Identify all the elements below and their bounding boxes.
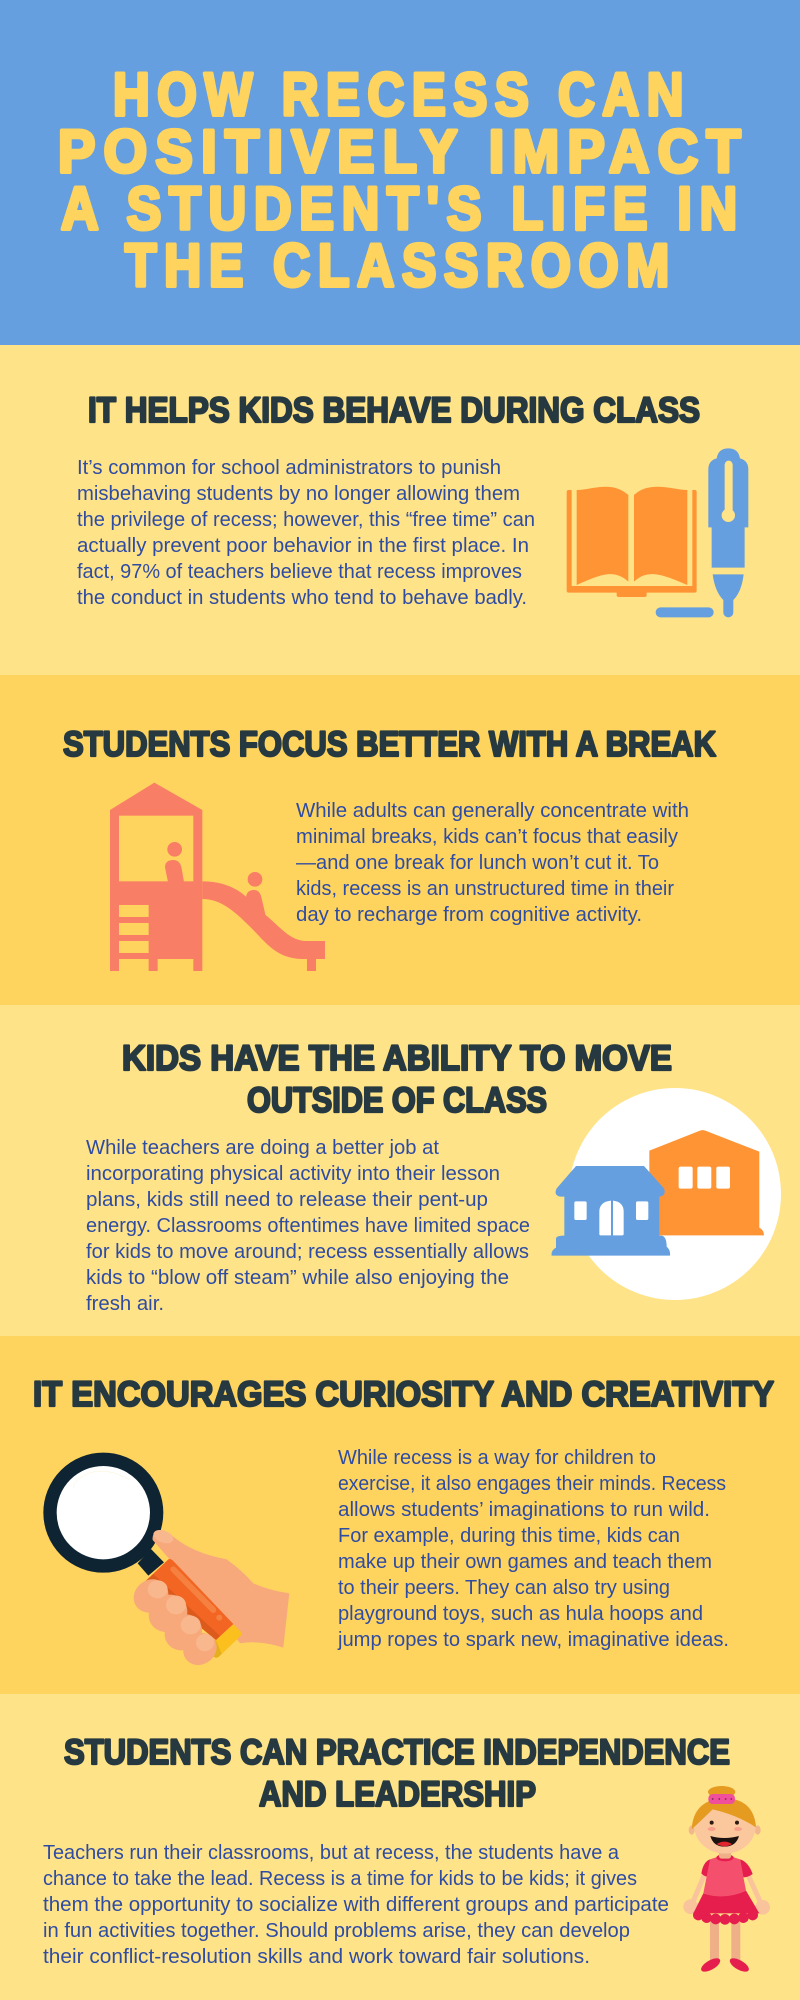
text block: independence (43, 1841, 669, 1968)
heading: behave: IT HELPS KIDS BEHAVE DURING CLASS (88, 391, 700, 430)
text block: independence: in fun activities together. Should problems arise, they can develop (43, 1919, 630, 1942)
text block: focus: day to recharge from cognitive activity. (296, 903, 642, 926)
text block: move: for kids to move around; recess essentially allows (86, 1240, 529, 1263)
text block: independence: Teachers run their classrooms, but at recess, the students have a (43, 1841, 620, 1864)
icon: school buildings on white circle (552, 1088, 781, 1300)
text block: focus: While adults can generally concentrate with (296, 799, 689, 822)
heading: move: OUTSIDE OF CLASS (247, 1081, 547, 1120)
text block: move: kids to “blow off steam” while also enjoying the (86, 1266, 509, 1289)
title (58, 61, 749, 299)
panel: focus with a break (0, 675, 800, 1005)
text block: curiosity: make up their own games and teach them (338, 1550, 712, 1573)
text block: behave: It’s common for school administrators to punish (77, 456, 501, 479)
text block: independence: chance to take the lead. Recess is a time for kids to be kids; it gives (43, 1867, 637, 1890)
text block: focus (296, 799, 689, 926)
text block: focus: minimal breaks, kids can’t focus that easily (296, 825, 679, 848)
icon: playground slide (110, 783, 325, 971)
title: HOW RECESS CAN (113, 61, 691, 128)
heading: move: KIDS HAVE THE ABILITY TO MOVE (122, 1039, 672, 1078)
text block: behave: the conduct in students who tend to behave badly. (77, 586, 527, 609)
text block: behave: misbehaving students by no longer allowing them (77, 482, 520, 505)
text block: curiosity: jump ropes to spark new, imaginative ideas. (337, 1628, 729, 1651)
heading: independence: STUDENTS CAN PRACTICE INDEPENDENCE (64, 1733, 730, 1772)
title: POSITIVELY IMPACT (58, 118, 749, 185)
text block: curiosity: to their peers. They can also try using (338, 1576, 670, 1599)
text block: independence: their conflict-resolution skills and work toward fair solutions. (43, 1945, 590, 1968)
text block: move: energy. Classrooms oftentimes have limited space (86, 1214, 530, 1237)
text block: focus: kids, recess is an unstructured time in their (296, 877, 674, 900)
text block: behave: the privilege of recess; however, this “free time” can (77, 508, 535, 531)
text block: curiosity (337, 1446, 729, 1651)
panel: behave during class (0, 345, 800, 675)
text block: focus: —and one break for lunch won’t cut it. To (296, 851, 659, 874)
heading: independence: AND LEADERSHIP (259, 1775, 536, 1814)
text block: curiosity: While recess is a way for children to (338, 1446, 656, 1469)
icon: smiling girl (683, 1786, 770, 1974)
text block: curiosity: exercise, it also engages their minds. Recess (338, 1472, 726, 1495)
icon: fountain pen (656, 448, 748, 617)
panel: independence and leadership (0, 1694, 800, 2000)
text block: move: plans, kids still need to release their pent-up (86, 1188, 488, 1211)
text block: curiosity: For example, during this time, kids can (338, 1524, 680, 1547)
heading: move (122, 1039, 672, 1120)
text block: behave (77, 456, 535, 609)
text block: move: While teachers are doing a better job at (86, 1136, 439, 1159)
panel: title header (0, 0, 800, 345)
text block: independence: them the opportunity to socialize with different groups and participate (43, 1893, 669, 1916)
heading: focus: STUDENTS FOCUS BETTER WITH A BREAK (63, 725, 716, 764)
icon: open book (567, 487, 697, 597)
panel: ability to move (0, 1005, 800, 1336)
text block: move: incorporating physical activity into their lesson (86, 1162, 500, 1185)
text block: move (86, 1136, 530, 1315)
heading: independence (64, 1733, 730, 1814)
title: THE CLASSROOM (125, 232, 677, 299)
text block: curiosity: playground toys, such as hula hoops and (338, 1602, 703, 1625)
text block: move: fresh air. (86, 1292, 164, 1315)
text block: behave: fact, 97% of teachers believe that recess improves (77, 560, 522, 583)
panel: curiosity and creativity (0, 1336, 800, 1694)
text block: behave: actually prevent poor behavior in the first place. In (77, 534, 529, 557)
text block: curiosity: allows students’ imaginations to run wild. (338, 1498, 710, 1521)
icon: hand holding magnifying glass (50, 1459, 289, 1671)
